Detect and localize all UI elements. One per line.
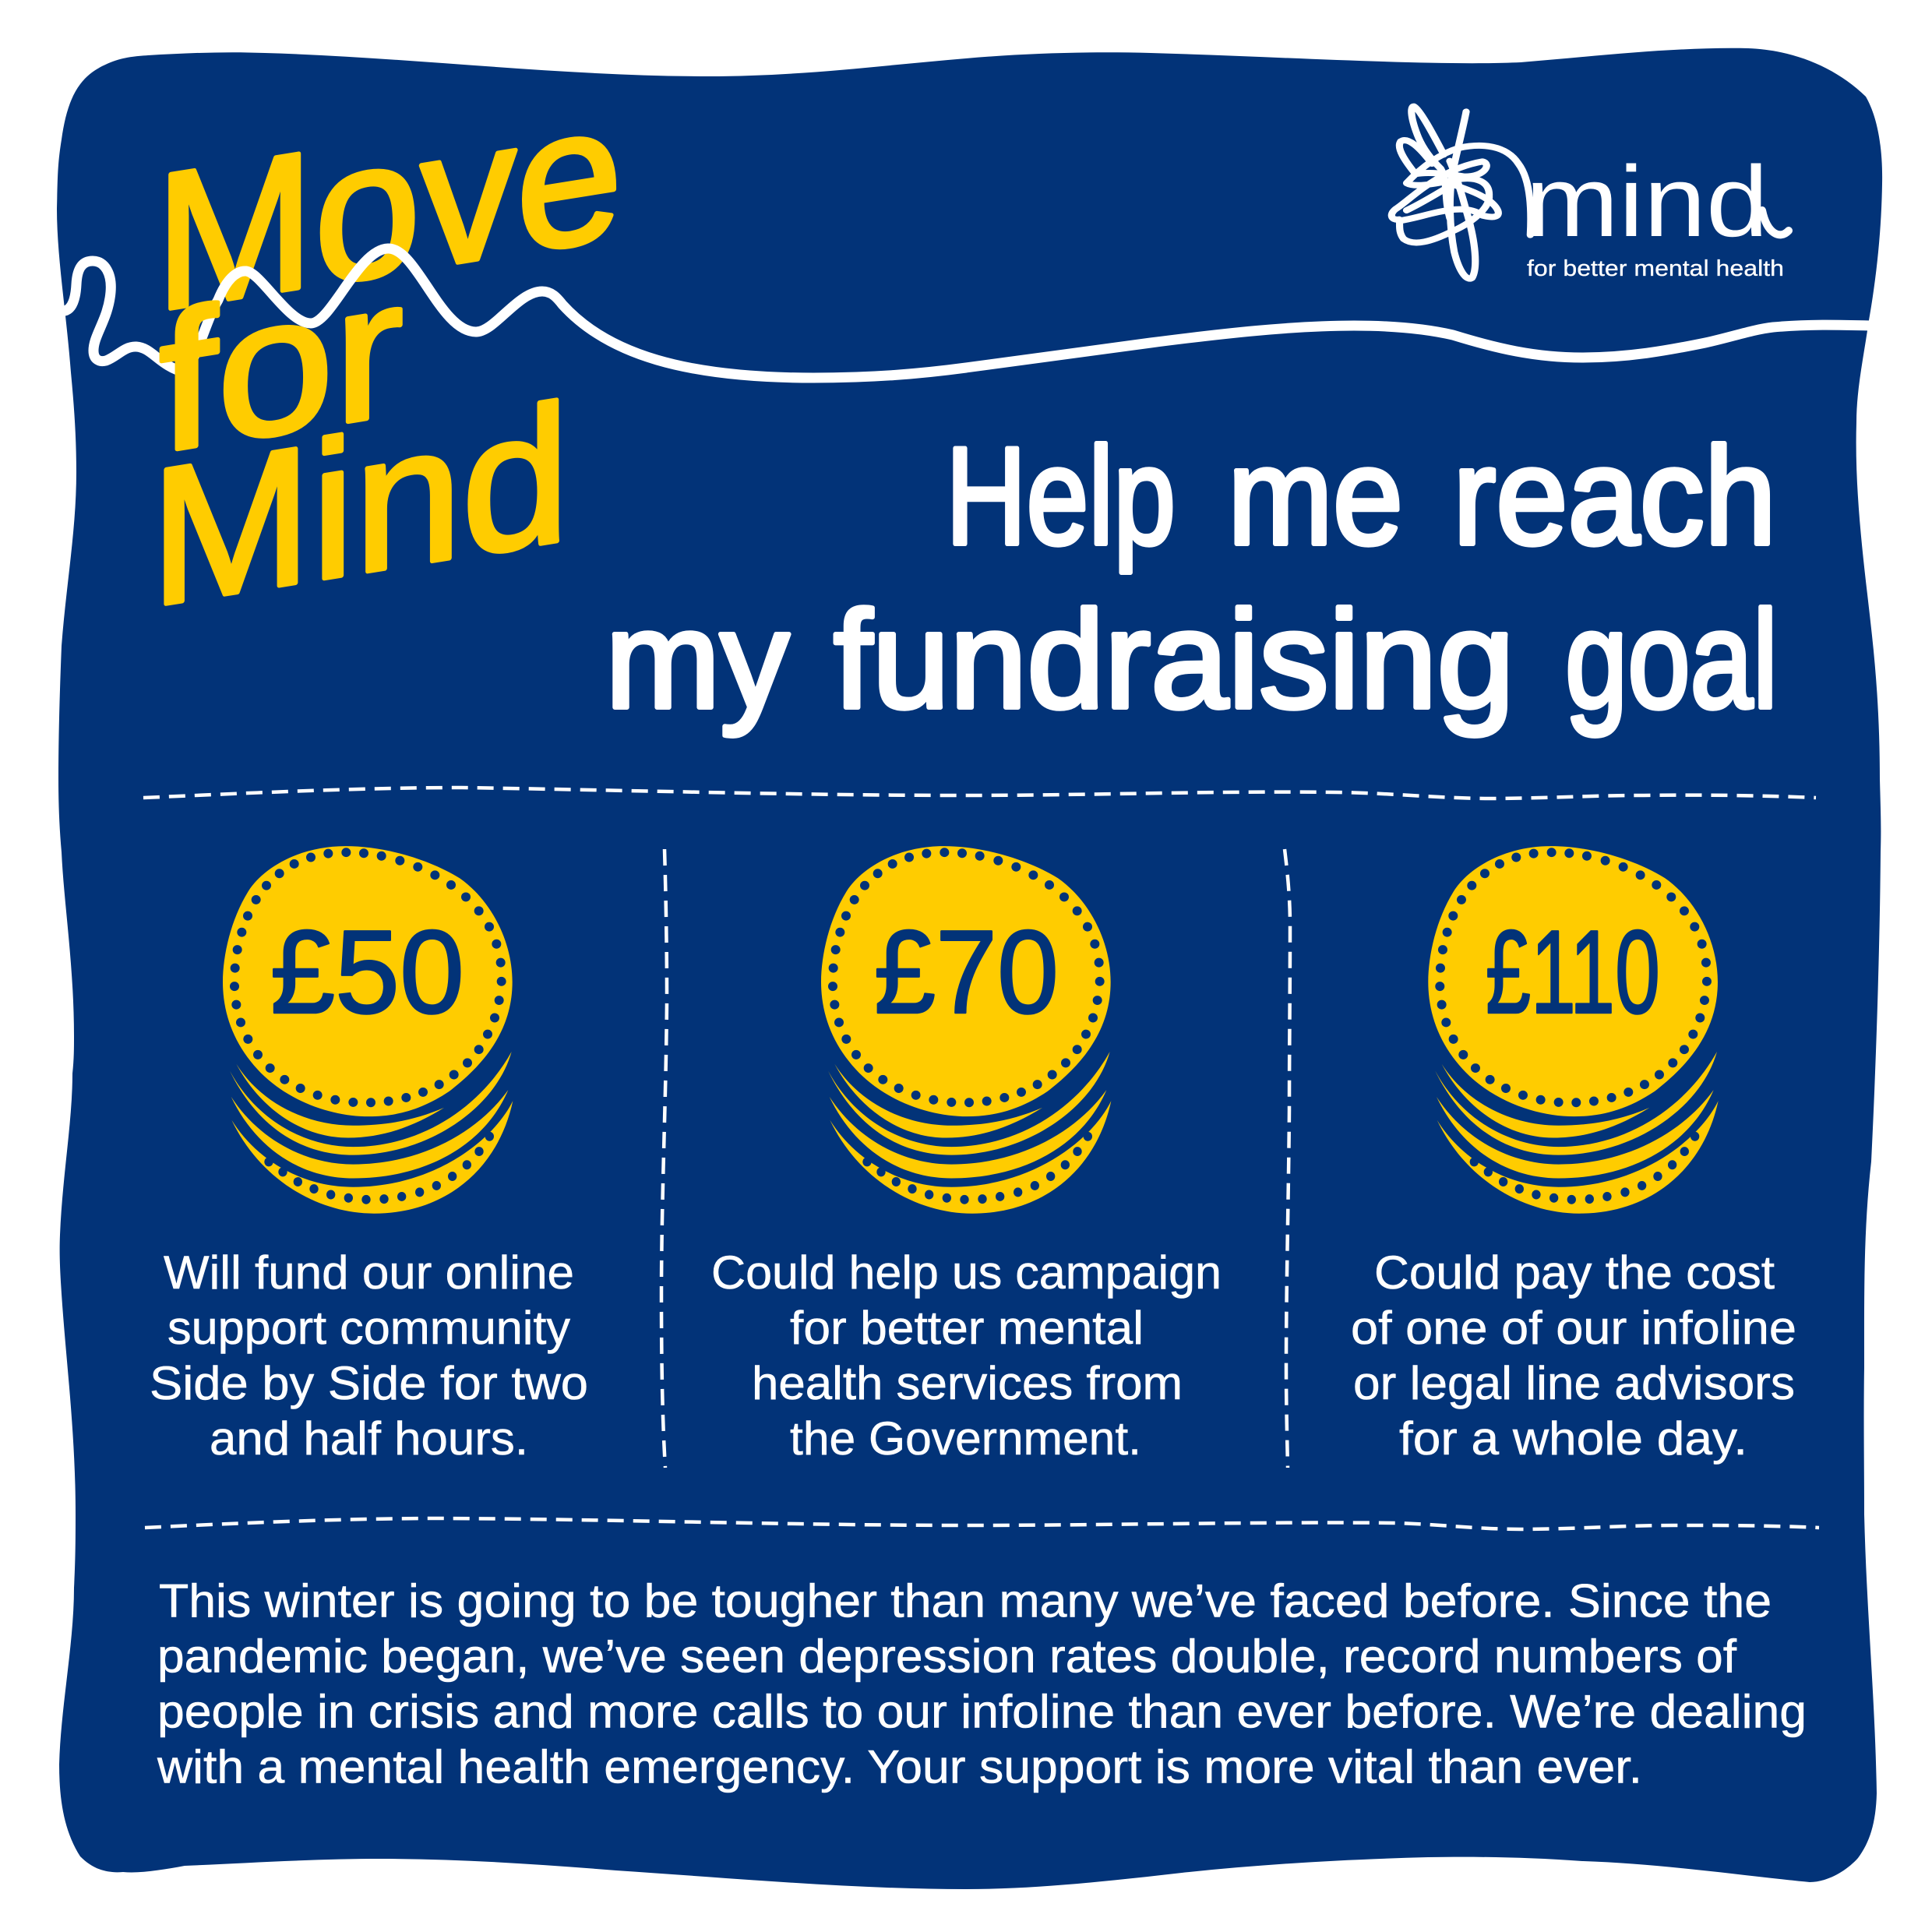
tagline: for better mental health (1527, 256, 1784, 281)
title: for: for (159, 237, 404, 494)
description: for a whole day. (1399, 1412, 1747, 1465)
coin amount: £70 (874, 906, 1059, 1038)
heading: fundraising (834, 582, 1514, 737)
column: £50 (150, 846, 588, 1465)
description (711, 1246, 1222, 1465)
title: Move: Move (155, 60, 622, 353)
description: support community (167, 1302, 570, 1354)
column: £110 (1351, 846, 1796, 1465)
description (1351, 1246, 1796, 1465)
description: health services from (752, 1357, 1183, 1409)
logo: Mind (1391, 107, 1789, 281)
closing paragraph: This winter is going to be tougher than many we’ve faced before. Since the (159, 1575, 1772, 1627)
closing paragraph: pandemic began, we’ve seen depression rates double, record numbers of (157, 1630, 1736, 1683)
icon: scribble (1391, 107, 1531, 279)
heading: reach (1453, 418, 1776, 573)
icon: coin stack £70 (821, 846, 1111, 1214)
description (150, 1246, 588, 1465)
closing paragraph: people in crisis and more calls to our infoline than ever before. We’re dealing (157, 1686, 1807, 1737)
description: for better mental (790, 1302, 1144, 1354)
icon: coin stack £110 (1428, 846, 1719, 1214)
heading: Help (946, 418, 1176, 573)
heading: me (1228, 418, 1403, 573)
icon: coin stack £50 (223, 846, 513, 1214)
description: Will fund our online (164, 1246, 574, 1299)
heading (605, 418, 1778, 737)
closing paragraph (157, 1575, 1807, 1793)
closing paragraph: with a mental health emergency. Your support is more vital than ever. (157, 1740, 1642, 1793)
wordmark tail (1762, 210, 1789, 234)
description: Could help us campaign (711, 1246, 1222, 1299)
heading: my (605, 582, 789, 737)
description: the Government. (790, 1412, 1141, 1465)
description: or legal line advisors (1353, 1357, 1795, 1409)
description: Side by Side for two (150, 1357, 588, 1409)
coin amount: £50 (270, 906, 464, 1038)
description: Could pay the cost (1374, 1246, 1775, 1299)
logo wordmark: mind (1525, 146, 1768, 258)
description: of one of our infoline (1351, 1302, 1796, 1354)
column: £70 (711, 846, 1222, 1465)
description: and half hours. (210, 1412, 528, 1465)
wavy white line (65, 249, 1871, 378)
heading: goal (1565, 582, 1778, 737)
coin amount: £110 (1486, 906, 1660, 1038)
title: Mind: Mind (150, 363, 569, 648)
